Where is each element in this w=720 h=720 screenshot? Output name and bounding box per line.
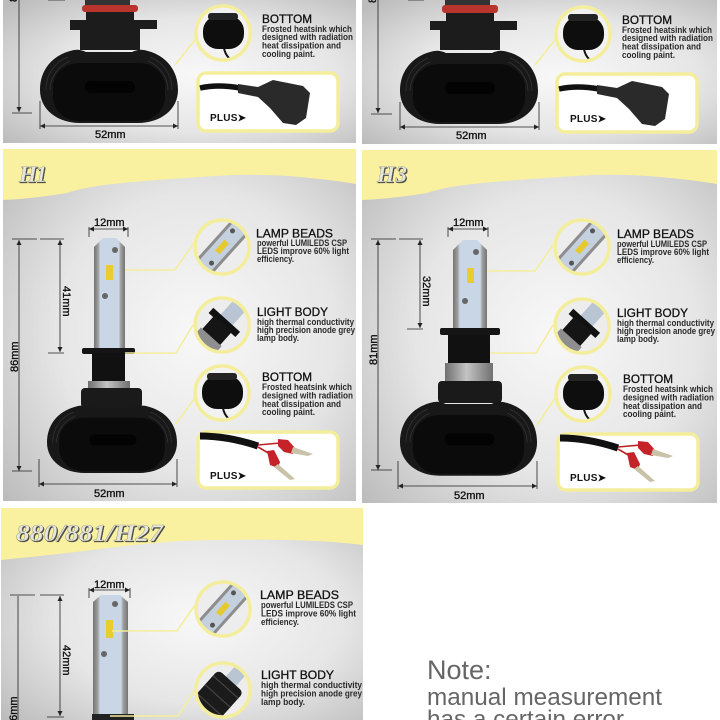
dimension: 42mm: [40, 595, 72, 717]
callout: bottom: designed with radiation: [262, 32, 353, 42]
connector: plus: PLUS➤: [570, 114, 607, 125]
callout: bottom: [196, 6, 353, 60]
callout: lamp beads: efficiency.: [261, 617, 299, 627]
bulb: heatsink and socket: [400, 0, 538, 124]
note: manual measurement: manual measurement: [427, 684, 662, 711]
dimension: 52mm: 52mm: [454, 490, 485, 502]
dimension: 52mm: [40, 101, 178, 141]
callout: light body: LIGHT BODY: [617, 306, 688, 320]
dimension: 52mm: [398, 461, 537, 502]
callout: bottom: Frosted heatsink which: [262, 382, 352, 392]
callout: light body: high thermal conductivity: [257, 317, 354, 327]
panel: H3: [362, 150, 717, 503]
callout: light body: [185, 286, 355, 364]
dimension: 52mm: [39, 459, 177, 500]
callout: bottom: heat dissipation and: [622, 42, 701, 52]
callout: light body: LIGHT BODY: [261, 668, 334, 682]
bulb: heatsink and socket: [40, 0, 178, 123]
callout: light body: lamp body.: [617, 334, 659, 344]
connector: plus: PLUS➤: [210, 471, 247, 482]
dimension: 81mm: 81mm: [368, 334, 380, 365]
callout: light body: lamp body.: [257, 333, 299, 343]
callout: light body: lamp body.: [261, 697, 305, 707]
panel: H1: [3, 149, 356, 501]
dimension: 81mm: [368, 239, 396, 470]
bulb: 880: [92, 595, 134, 720]
callout: lamp beads: efficiency.: [617, 255, 654, 265]
callout: lamp beads: LAMP BEADS: [260, 588, 339, 602]
callout: bottom: BOTTOM: [623, 372, 673, 386]
dimension: 86mm: 86mm: [9, 341, 21, 372]
callout: lamp beads: [550, 213, 709, 281]
banner: yellow wave: [362, 150, 717, 200]
dimension: 12mm: 12mm: [94, 579, 125, 591]
dimension: 86mm: [9, 239, 37, 471]
callout: lamp beads: LEDS improve 60% light: [617, 247, 709, 257]
callout: bottom: designed with radiation: [622, 33, 713, 43]
note: manual measurement: Note:: [427, 655, 492, 685]
connector: plus: [198, 73, 338, 131]
callout: bottom: Frosted heatsink which: [622, 25, 712, 35]
dimension: 42mm: 42mm: [60, 645, 72, 676]
callout: bottom: cooling paint.: [623, 409, 676, 419]
callout: bottom: BOTTOM: [262, 370, 312, 384]
callout: bottom: cooling paint.: [262, 49, 315, 59]
connector: plus: [558, 434, 698, 490]
callout: bottom: BOTTOM: [262, 12, 312, 26]
callout: light body: high thermal conductivity: [261, 680, 362, 690]
dimension: 86mm: [8, 595, 35, 720]
callout: lamp beads: LEDS improve 60% light: [257, 246, 349, 256]
callout: bottom: Frosted heatsink which: [262, 24, 352, 34]
dimension: 52mm: 52mm: [94, 488, 125, 500]
callout: lamp beads: [191, 575, 356, 643]
dimension: 12mm: [89, 579, 130, 598]
connector: plus: PLUS➤: [210, 113, 247, 124]
title: 880/881/H27: 880/881/H27: [16, 521, 164, 547]
dimension: 32mm: 32mm: [420, 276, 432, 307]
callout: lamp beads: powerful LUMILEDS CSP: [261, 600, 353, 610]
dimension: 52mm: [400, 102, 539, 142]
callout: bottom: heat dissipation and: [623, 401, 702, 411]
callout: bottom: heat dissipation and: [262, 40, 341, 50]
callout: bottom: designed with radiation: [262, 390, 353, 400]
title: H1: H1: [18, 162, 47, 187]
panel: 9005 bulb, cropped: [3, 0, 356, 143]
callout: light body: high precision anode grey: [257, 325, 355, 335]
callout: bottom: cooling paint.: [622, 50, 675, 60]
callout: light body: LIGHT BODY: [257, 305, 328, 319]
callout: lamp beads: powerful LUMILEDS CSP: [257, 238, 347, 248]
panel: 880/881/H27: [1, 508, 363, 720]
callout: lamp beads: LEDS improve 60% light: [261, 608, 356, 618]
dimension: 12mm: [89, 217, 128, 237]
dimension: 12mm: [448, 217, 488, 237]
banner: yellow wave: [3, 149, 356, 200]
note: manual measurement: [427, 655, 662, 720]
connector: plus: [557, 74, 697, 132]
dimension: 41mm: 41mm: [60, 286, 72, 317]
connector: plus: PLUS➤: [570, 473, 607, 484]
dimension: 32mm: [399, 239, 432, 329]
callout: bottom: cooling paint.: [262, 407, 315, 417]
dimension: 12mm: 12mm: [94, 217, 125, 229]
bulb: H1: [47, 238, 177, 473]
dimension: 52mm: 52mm: [456, 130, 487, 142]
banner: yellow wave: [1, 508, 363, 560]
callout: light body: high precision anode grey: [261, 688, 362, 698]
bulb: H3: [400, 240, 537, 476]
title: H3: H3: [376, 162, 407, 187]
callout: bottom: [556, 7, 713, 61]
callout: bottom: heat dissipation and: [262, 399, 341, 409]
callout: lamp beads: LAMP BEADS: [617, 227, 694, 241]
callout: lamp beads: [190, 213, 349, 281]
connector: plus: [198, 432, 338, 488]
callout: light body: [186, 652, 362, 720]
callout: bottom: [556, 367, 714, 421]
callout: bottom: BOTTOM: [622, 13, 672, 27]
dimension: 12mm: 12mm: [453, 217, 484, 229]
dimension: height: [367, 0, 424, 114]
callout: lamp beads: efficiency.: [257, 254, 294, 264]
callout: bottom: [195, 366, 353, 420]
callout: lamp beads: LAMP BEADS: [256, 226, 333, 240]
dimension: 41mm: [40, 239, 72, 353]
dimension: 52mm: 52mm: [95, 129, 126, 141]
callout: light body: [545, 287, 715, 365]
dimension: height: [8, 0, 65, 113]
panel: second 9006 bulb, cropped: [362, 0, 717, 144]
